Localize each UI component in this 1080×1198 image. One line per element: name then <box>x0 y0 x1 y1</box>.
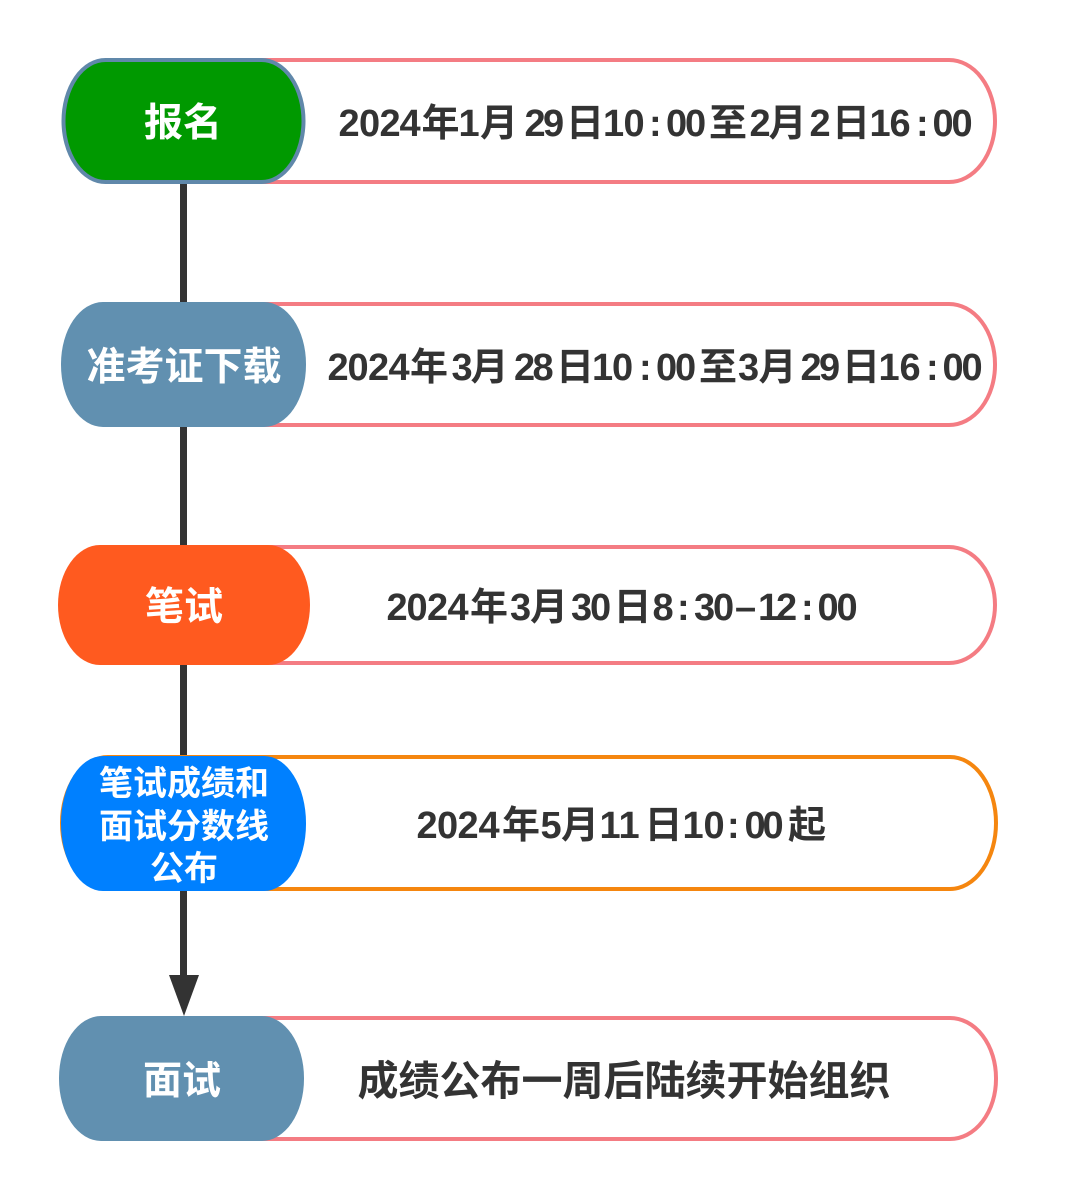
label pill 4: 面试分数线 <box>99 808 269 846</box>
step 3: written exam <box>58 545 995 665</box>
date panel 4: 2024年5月11日10:00起 <box>416 805 826 847</box>
date panel 3: 2024年3月30日8:30–12:00 <box>386 587 858 629</box>
step 2: admission ticket <box>61 302 995 427</box>
label pill 1 <box>64 60 304 182</box>
label pill 2 <box>61 302 306 427</box>
connector arrow <box>169 180 199 1016</box>
date panel 1: 2024年1月29日10:00至2月2日16:00 <box>338 103 973 145</box>
date panel 5 <box>200 1018 996 1139</box>
date panel 4 <box>62 757 996 889</box>
label pill 4 <box>61 756 306 891</box>
label pill 3 <box>58 545 310 665</box>
date panel 5: 成绩公布一周后陆续开始组织 <box>358 1058 890 1104</box>
step 5: interview <box>59 1016 996 1141</box>
date panel 1 <box>200 60 995 182</box>
label pill 5: 面试 <box>143 1060 221 1103</box>
label pill 2: 准考证下载 <box>86 346 282 389</box>
step 4: results <box>61 756 996 891</box>
step 1: registration <box>64 60 995 182</box>
label pill 1: 报名 <box>144 102 222 145</box>
label pill 4: 笔试成绩和 <box>99 765 269 803</box>
label pill 5 <box>59 1016 304 1141</box>
label pill 3: 笔试 <box>145 586 223 629</box>
date panel 2: 2024年3月28日10:00至3月29日16:00 <box>328 347 983 389</box>
label pill 4: 公布 <box>150 850 218 888</box>
date panel 3 <box>200 547 995 663</box>
date panel 2 <box>200 304 995 425</box>
